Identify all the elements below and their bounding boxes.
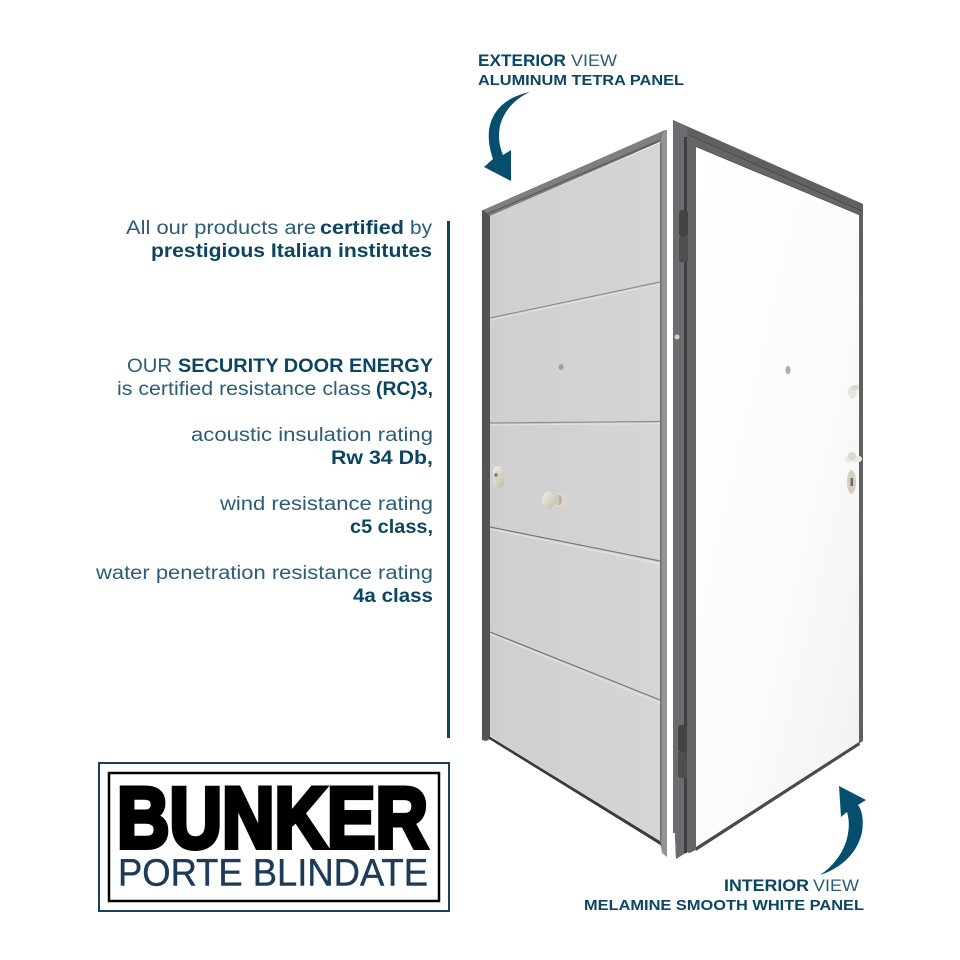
door: exterior view — [482, 130, 667, 857]
vertical divider line — [447, 221, 450, 738]
logo: Bunker Porte Blindate — [99, 763, 449, 911]
text block: security door ratings: is certified resistance class — [117, 379, 371, 400]
handle: lever — [845, 452, 862, 462]
panel: aluminium tetra — [490, 143, 660, 841]
heading: interior view — [584, 877, 864, 914]
keyhole plate — [847, 470, 856, 494]
text block: certification statement: certified — [320, 218, 404, 239]
heading: exterior view: VIEW — [571, 52, 617, 70]
frame: exterior door — [482, 130, 667, 857]
text block: security door ratings: SECURITY DOOR ENERGY — [178, 356, 433, 377]
logo: Bunker Porte Blindate: BUNKER — [117, 770, 428, 866]
text block: security door ratings: 4a class — [353, 586, 433, 607]
heading: interior view: MELAMINE SMOOTH WHITE PANEL — [584, 897, 864, 914]
text block: security door ratings: OUR — [127, 356, 172, 377]
arrow: exterior view — [484, 92, 530, 181]
text block: certification statement: All our products are — [126, 218, 316, 239]
text block: security door ratings: c5 class, — [350, 517, 433, 538]
heading: exterior view: EXTERIOR — [478, 52, 566, 70]
door knob — [542, 492, 567, 509]
text block: security door ratings: (RC)3, — [376, 379, 433, 400]
door: interior view — [673, 120, 863, 859]
heading: interior view: VIEW — [813, 877, 859, 895]
text block: certification statement: by — [410, 218, 433, 239]
text block: security door ratings: acoustic insulation rating — [191, 425, 433, 446]
arrow: interior view — [820, 786, 866, 875]
text block: security door ratings: Rw 34 Db, — [331, 448, 433, 469]
logo: Bunker Porte Blindate: PORTE BLINDATE — [118, 852, 428, 894]
heading: interior view: INTERIOR — [724, 877, 809, 895]
spy hole — [558, 364, 564, 370]
hinge: top — [679, 210, 688, 262]
handle: upper lock — [848, 385, 859, 398]
panel grooves — [490, 282, 660, 703]
lock cylinder — [493, 466, 504, 488]
panel: melamine smooth white — [696, 147, 859, 847]
heading: exterior view: ALUMINUM TETRA PANEL — [478, 72, 684, 89]
text block: certification statement: prestigious Italian institutes — [151, 241, 432, 262]
text block: certification statement — [126, 218, 433, 262]
text block: security door ratings — [95, 356, 433, 607]
hinge: bottom — [678, 725, 687, 778]
spy hole — [786, 366, 790, 374]
frame: interior door — [673, 120, 863, 859]
text block: security door ratings: wind resistance rating — [219, 494, 433, 515]
text block: security door ratings: water penetration resistance rating — [95, 563, 433, 584]
latch pin — [674, 334, 680, 340]
heading: exterior view — [478, 52, 684, 89]
